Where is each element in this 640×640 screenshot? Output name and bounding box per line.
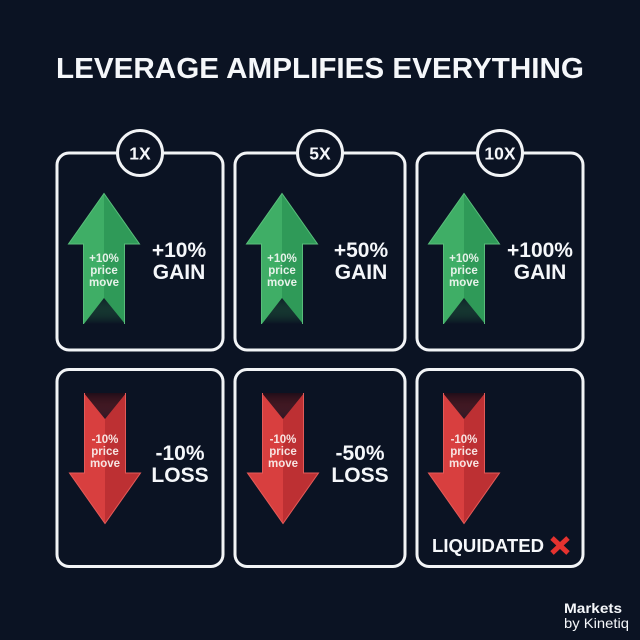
panel: 10X gain	[417, 130, 583, 350]
result: -50% loss	[331, 442, 389, 487]
result: -50% loss: LOSS	[331, 464, 389, 487]
icon: red down arrow, -10% price move: price	[91, 446, 119, 458]
logo: Markets by Kinetiq	[564, 601, 629, 631]
result: +10% gain: GAIN	[153, 261, 205, 284]
icon: green up arrow, +10% price move	[68, 193, 140, 324]
result: +10% gain	[152, 239, 206, 284]
icon: red down arrow, -10% price move: -10%	[92, 434, 118, 446]
panel: 5X gain	[235, 130, 405, 350]
icon: green up arrow, +10% price move: move	[449, 277, 479, 289]
badge: 10X: 10X	[484, 144, 516, 164]
panel: 5X loss	[235, 370, 405, 566]
panel: 1X gain	[57, 130, 223, 350]
badge: 10X	[478, 130, 522, 176]
title: LEVERAGE AMPLIFIES EVERYTHING	[56, 53, 584, 85]
panel: 1X loss	[57, 370, 223, 566]
icon: red down arrow, -10% price move	[428, 393, 500, 524]
result: -10% loss	[151, 442, 209, 487]
icon: green up arrow, +10% price move: +10%	[267, 253, 297, 265]
result: +50% gain: +50%	[334, 239, 388, 262]
icon: red down arrow, -10% price move: price	[450, 446, 478, 458]
logo: Markets by Kinetiq: by Kinetiq	[564, 615, 629, 631]
result: +50% gain	[334, 239, 388, 284]
result: +50% gain: GAIN	[335, 261, 387, 284]
icon: green up arrow, +10% price move: price	[90, 265, 118, 277]
logo: Markets by Kinetiq: Markets	[564, 601, 622, 616]
icon: green up arrow, +10% price move: price	[450, 265, 478, 277]
result: +100% gain: GAIN	[514, 261, 566, 284]
icon: red down arrow, -10% price move: price	[269, 446, 297, 458]
result: -50% loss: -50%	[335, 442, 385, 465]
result: -10% loss: LOSS	[151, 464, 209, 487]
panel: 10X liquidated	[417, 370, 583, 566]
badge: 5X: 5X	[309, 144, 331, 164]
icon: red down arrow, -10% price move: -10%	[270, 434, 296, 446]
icon: red down arrow, -10% price move: move	[449, 458, 479, 470]
result: +10% gain: +10%	[152, 239, 206, 262]
result: +100% gain	[507, 239, 573, 284]
icon: green up arrow, +10% price move	[246, 193, 318, 324]
icon: red down arrow, -10% price move	[69, 393, 141, 524]
badge: 5X	[298, 130, 342, 176]
icon: green up arrow, +10% price move: move	[89, 277, 119, 289]
icon: green up arrow, +10% price move: +10%	[449, 253, 479, 265]
icon: red cross	[552, 538, 568, 553]
badge: 1X: 1X	[129, 144, 151, 164]
icon: red down arrow, -10% price move: -10%	[451, 434, 477, 446]
icon: green up arrow, +10% price move	[428, 193, 500, 324]
icon: red down arrow, -10% price move	[247, 393, 319, 524]
result: -10% loss: -10%	[155, 442, 205, 465]
icon: red down arrow, -10% price move: move	[268, 458, 298, 470]
badge: 1X	[118, 130, 162, 176]
result: +100% gain: +100%	[507, 239, 573, 262]
result: liquidated: LIQUIDATED	[432, 536, 544, 556]
icon: green up arrow, +10% price move: price	[268, 265, 296, 277]
icon: green up arrow, +10% price move: move	[267, 277, 297, 289]
icon: red down arrow, -10% price move: move	[90, 458, 120, 470]
icon: green up arrow, +10% price move: +10%	[89, 253, 119, 265]
